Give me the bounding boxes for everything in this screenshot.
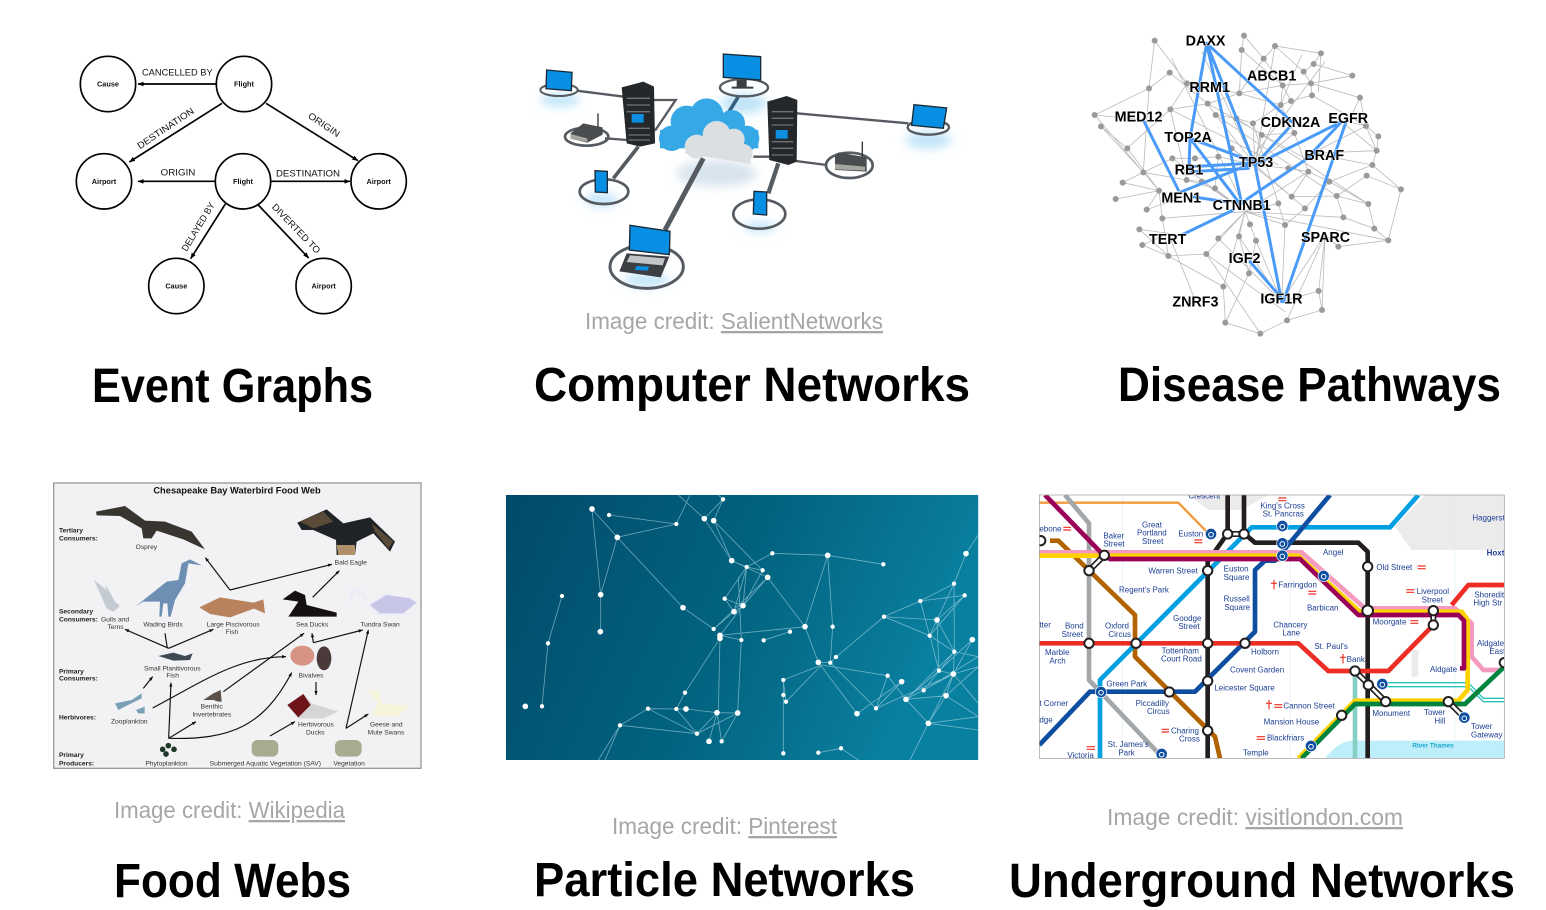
station names: St. Paul's	[1314, 642, 1348, 651]
network gene labels: SPARC	[1301, 230, 1350, 246]
food web labels: Primary	[59, 669, 84, 676]
food web labels: Herbivorous	[298, 722, 335, 729]
icon: phytoplankton	[163, 746, 174, 754]
food web labels: Sea Ducks	[296, 621, 329, 628]
station names: Bond	[1065, 622, 1084, 631]
icon: zooplankton	[115, 693, 145, 713]
food web labels: Gulls and	[101, 616, 129, 623]
panel: event graph diagram: Airport	[311, 282, 336, 291]
station names: Liverpool	[1417, 587, 1449, 596]
station names: ebone	[1039, 524, 1062, 533]
food web labels: Mute Swans	[368, 730, 405, 737]
food web labels: Secondary	[59, 609, 93, 616]
station names: King's Cross	[1260, 502, 1305, 511]
station names: Shoredit	[1474, 590, 1505, 599]
icon: small fish	[158, 653, 193, 661]
station names: Bank	[1347, 655, 1365, 664]
food web arrows	[125, 558, 368, 738]
network gene labels: TP53	[1239, 155, 1273, 171]
panel: event graph diagram: Flight	[233, 177, 254, 186]
station names: Victoria	[1067, 751, 1094, 760]
station names: Barbican	[1307, 604, 1339, 613]
food web labels: Small Planitivorous	[144, 665, 201, 672]
heading: Computer Networks: Computer Networks	[534, 359, 970, 412]
station names: Green Park	[1106, 679, 1147, 688]
station names: Square	[1224, 573, 1250, 582]
station names: Gateway	[1471, 730, 1503, 739]
panel: event graph diagram: CANCELLED BY	[142, 68, 213, 78]
panel: event graph diagram: DESTINATION	[136, 106, 196, 151]
network gene labels: MEN1	[1161, 191, 1201, 207]
network gene labels: EGFR	[1328, 111, 1369, 127]
station names: Street	[1142, 537, 1164, 546]
particle links	[542, 495, 978, 760]
icon: large fish	[199, 597, 265, 617]
network gene labels: DAXX	[1186, 34, 1226, 50]
caption: SalientNetworks credit: Image credit: SalientNetworks	[585, 308, 883, 334]
food web labels: Bivalves	[299, 673, 324, 680]
station names: Cross	[1179, 735, 1200, 744]
station names: Oxford	[1105, 622, 1129, 631]
station names: Moorgate	[1373, 618, 1407, 627]
food web labels: Terns	[107, 624, 124, 631]
panel: particle network	[506, 495, 978, 760]
station names: Circus	[1147, 707, 1170, 716]
food web labels: Geese and	[370, 722, 403, 729]
caption: Pinterest credit: Image credit: Pinterest	[612, 813, 838, 839]
panel: food web: Chesapeake Bay Waterbird Food Web	[153, 486, 321, 496]
station names: tter	[1039, 620, 1051, 629]
station names: Aldgate	[1430, 665, 1458, 674]
station names: Mansion House	[1264, 717, 1320, 726]
food web labels: Ducks	[306, 730, 325, 737]
panel: event graph diagram: Flight	[234, 80, 255, 89]
station names: Temple	[1243, 748, 1269, 757]
food web labels: Benthic	[201, 704, 224, 711]
panel: food web	[54, 483, 421, 768]
station names: Baker	[1103, 532, 1125, 541]
station names: Blackfriars	[1267, 733, 1304, 742]
station names: Hill	[1434, 716, 1446, 725]
station names: Street	[1178, 622, 1200, 631]
station names: Holborn	[1251, 648, 1279, 657]
station names: St. James's	[1108, 740, 1149, 749]
food web labels: Producers:	[59, 760, 94, 767]
station names: Old Street	[1376, 563, 1413, 572]
station names: Leicester Square	[1214, 684, 1275, 693]
icon: aquatic vegetation	[252, 740, 362, 757]
food web labels: Tertiary	[59, 528, 83, 535]
icon: servers	[622, 82, 797, 165]
icon: osprey	[96, 506, 205, 549]
station names: Tower	[1424, 708, 1446, 717]
network gene labels: IGF1R	[1260, 292, 1303, 308]
station names: High Str	[1473, 598, 1503, 607]
river thames	[1325, 741, 1504, 758]
station names: Warren Street	[1148, 566, 1199, 575]
station names: Russell	[1224, 595, 1250, 604]
heading: Food Webs: Food Webs	[114, 855, 351, 908]
icon: benthic invertebrates	[203, 690, 222, 702]
panel: event graph diagram: Cause	[97, 80, 119, 89]
panel: event graph diagram: DIVERTED TO	[270, 202, 322, 255]
network gene labels: IGF2	[1229, 251, 1261, 267]
food web labels: Bald Eagle	[335, 560, 367, 567]
food web labels: Wading Birds	[143, 621, 183, 628]
network gene labels: TOP2A	[1164, 130, 1212, 146]
station names: Euston	[1224, 565, 1249, 574]
panel: event graph diagram: DESTINATION	[276, 168, 340, 178]
network gene labels	[1115, 34, 1369, 311]
network gene labels: ABCB1	[1247, 69, 1296, 85]
tube lines	[1039, 495, 1504, 758]
panel: event graph diagram	[76, 56, 406, 314]
food web labels: Osprey	[136, 544, 158, 551]
station names: dge	[1039, 716, 1053, 725]
heading: Particle Networks: Particle Networks	[534, 854, 915, 907]
station names: Street	[1103, 540, 1125, 549]
panel: event graph diagram: ORIGIN	[306, 111, 342, 139]
station names: Euston	[1178, 530, 1203, 539]
heading: Disease Pathways: Disease Pathways	[1118, 359, 1501, 412]
station names: Portland	[1137, 529, 1167, 538]
panel: event graph diagram: Airport	[366, 177, 391, 186]
food web labels: Consumers:	[59, 616, 98, 623]
food web labels: Fish	[166, 672, 179, 679]
network gene labels: RB1	[1175, 163, 1203, 179]
station names: Marble	[1045, 648, 1070, 657]
stations	[1036, 529, 1509, 735]
food web labels: Vegetation	[333, 760, 365, 767]
station names: Lane	[1282, 629, 1301, 638]
network gene labels: ZNRF3	[1172, 295, 1219, 311]
station names: Regent's Park	[1119, 586, 1169, 595]
food web labels: Herbivores:	[59, 714, 96, 721]
station names: Tower	[1471, 722, 1493, 731]
network gene labels: MED12	[1115, 110, 1162, 126]
icon: screens and devices	[546, 54, 947, 255]
food web labels: Primary	[59, 752, 84, 759]
network gene labels: CTNNB1	[1213, 198, 1271, 214]
station names: Arch	[1049, 656, 1066, 665]
panel: underground map: River Thames	[1412, 743, 1454, 750]
station names: Charing	[1171, 727, 1199, 736]
network gene labels: TERT	[1149, 232, 1187, 248]
station names: Covent Garden	[1230, 666, 1284, 675]
icon: bald eagle	[297, 509, 395, 555]
station names: Crescent	[1188, 492, 1221, 501]
panel: event graph diagram: Cause	[165, 282, 187, 291]
station names: Goodge	[1173, 614, 1202, 623]
icon: bivalves	[290, 646, 331, 670]
panel: disease pathway network	[1095, 34, 1401, 334]
panel: event graph diagram: Airport	[92, 177, 117, 186]
icon: goose	[367, 689, 409, 716]
food web labels	[59, 528, 405, 767]
network gene labels: RRM1	[1189, 80, 1230, 96]
station names	[1039, 492, 1506, 760]
food web labels: Submerged Aquatic Vegetation (SAV)	[210, 760, 321, 767]
food web labels: Fish	[226, 629, 239, 636]
station names: Cannon Street	[1283, 702, 1336, 711]
caption: Wikipedia credit: Image credit: Wikipedia	[114, 797, 345, 823]
food web labels: Zooplankton	[111, 718, 148, 725]
station names: Chancery	[1273, 620, 1308, 629]
station names: Farringdon	[1278, 581, 1317, 590]
station names: Street	[1422, 595, 1444, 604]
red rail symbols	[1063, 498, 1426, 749]
panel: event graph diagram: ORIGIN	[161, 168, 195, 178]
station names: Piccadilly	[1136, 699, 1169, 708]
station names: Tottenham	[1162, 646, 1199, 655]
panel: underground map	[1036, 492, 1509, 760]
food web labels: Consumers:	[59, 676, 98, 683]
station names: Street	[1062, 630, 1084, 639]
station names: Square	[1224, 603, 1251, 612]
station names: St. Pancras	[1263, 510, 1304, 519]
station names: Court Road	[1161, 655, 1202, 664]
station names: t Corner	[1039, 699, 1069, 708]
food web labels: Consumers:	[59, 536, 98, 543]
food web labels: Invertebrates	[192, 712, 232, 719]
station interchanges	[1089, 534, 1464, 718]
station names: Circus	[1108, 630, 1131, 639]
heading: Event Graphs: Event Graphs	[92, 360, 373, 413]
heading: Underground Networks: Underground Networks	[1009, 855, 1515, 908]
network gene labels: BRAF	[1304, 148, 1344, 164]
icon: gull	[94, 580, 120, 612]
icon: herbivorous duck	[287, 694, 338, 718]
icon: routers	[571, 113, 867, 172]
station names: Haggerst	[1472, 514, 1506, 523]
icon: sea duck	[283, 591, 337, 617]
accessible stations	[1095, 520, 1470, 760]
caption: visitlondon credit: Image credit: visitlondon.com	[1107, 804, 1403, 830]
station names: Monument	[1372, 709, 1411, 718]
network gene labels: CDKN2A	[1261, 115, 1320, 131]
station names: East	[1489, 647, 1506, 656]
food web labels: Phytoplankton	[145, 760, 188, 767]
panel: computer network illustration	[540, 54, 952, 288]
food web labels: Tundra Swan	[360, 621, 400, 628]
icon: cloud	[659, 98, 759, 164]
station names: Hoxt	[1487, 548, 1505, 557]
icon: heron	[136, 559, 202, 617]
icon: tundra swan	[348, 587, 418, 615]
food web labels: Large Piscivorous	[207, 621, 260, 628]
particle nodes	[542, 499, 965, 753]
station names: Park	[1118, 748, 1135, 757]
station names: Aldgate	[1477, 639, 1505, 648]
station names: Angel	[1323, 548, 1344, 557]
station names: Great	[1142, 520, 1163, 529]
panel: event graph diagram: DELAYED BY	[180, 200, 217, 253]
